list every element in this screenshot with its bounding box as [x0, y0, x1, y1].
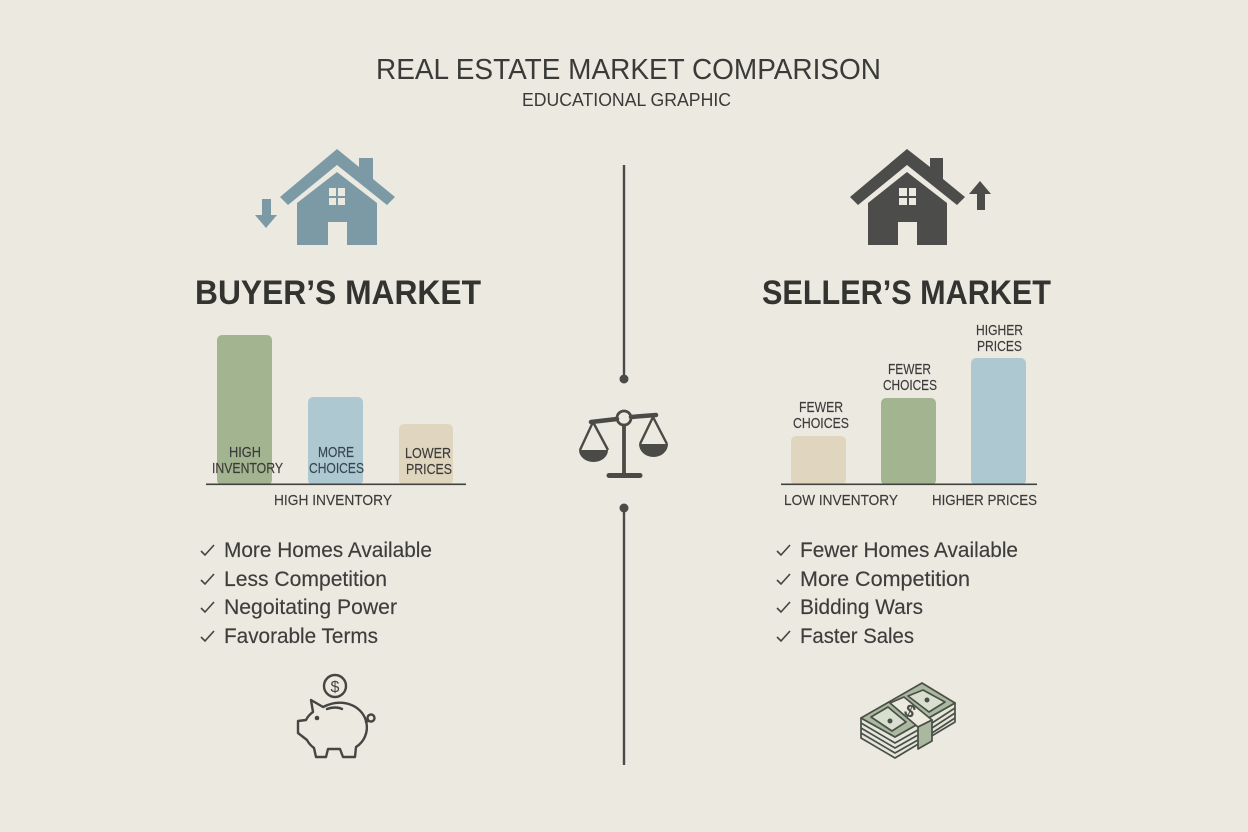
checklist: seller's market traits: Faster Sales [800, 625, 914, 648]
subtitle: EDUCATIONAL GRAPHIC [522, 90, 731, 110]
panel: seller's market [762, 149, 1051, 758]
bar chart: buyer's market: INVENTORY [212, 461, 283, 477]
center divider with balance scale [579, 165, 668, 765]
bar chart: seller's market: LOW INVENTORY [784, 492, 898, 509]
heading: buyer's market: BUYER’S MARKET [195, 274, 481, 312]
title: REAL ESTATE MARKET COMPARISON [376, 54, 881, 86]
bar chart: seller's market: CHOICES [883, 378, 937, 394]
bar chart: buyer's market: CHOICES [309, 461, 364, 477]
checklist: buyer's market benefits: More Homes Available [224, 539, 432, 562]
bar chart: buyer's market: HIGH INVENTORY [274, 492, 392, 509]
bar chart: seller's market: CHOICES [793, 416, 849, 432]
icon: blue house with down arrow [255, 149, 395, 245]
heading: seller's market: SELLER’S MARKET [762, 274, 1051, 312]
bar chart: seller's market: PRICES [977, 339, 1022, 355]
checklist: buyer's market benefits [201, 539, 432, 648]
bar chart: seller's market: FEWER [888, 362, 931, 378]
checklist: seller's market traits: Bidding Wars [800, 596, 923, 619]
bar chart: buyer's market: MORE [318, 445, 354, 461]
checklist: seller's market traits: More Competition [800, 568, 970, 591]
checklist: buyer's market benefits: Less Competition [224, 568, 387, 591]
bar chart: buyer's market: PRICES [406, 462, 452, 478]
icon: piggy bank with coin: $ [331, 679, 340, 696]
panel: buyer's market [195, 149, 481, 757]
bar chart: buyer's market [206, 335, 466, 509]
icon: stack of cash: $ [901, 700, 919, 722]
checklist: buyer's market benefits: Favorable Terms [224, 625, 378, 648]
checklist: buyer's market benefits: Negoitating Power [224, 596, 397, 619]
icon: piggy bank with coin [298, 675, 374, 757]
checklist: seller's market traits: Fewer Homes Available [800, 539, 1018, 562]
bar chart: seller's market: FEWER [799, 400, 843, 416]
icon: balance scale [579, 411, 668, 476]
bar chart: seller's market [781, 323, 1037, 509]
bar chart: buyer's market: HIGH [229, 445, 261, 461]
bar chart: seller's market: HIGHER PRICES [932, 492, 1037, 509]
bar chart: buyer's market: LOWER [405, 446, 451, 462]
checklist: seller's market traits [777, 539, 1018, 648]
bar chart: seller's market: HIGHER [976, 323, 1023, 339]
icon: dark house with up arrow [850, 149, 991, 245]
icon: stack of cash [861, 683, 955, 758]
